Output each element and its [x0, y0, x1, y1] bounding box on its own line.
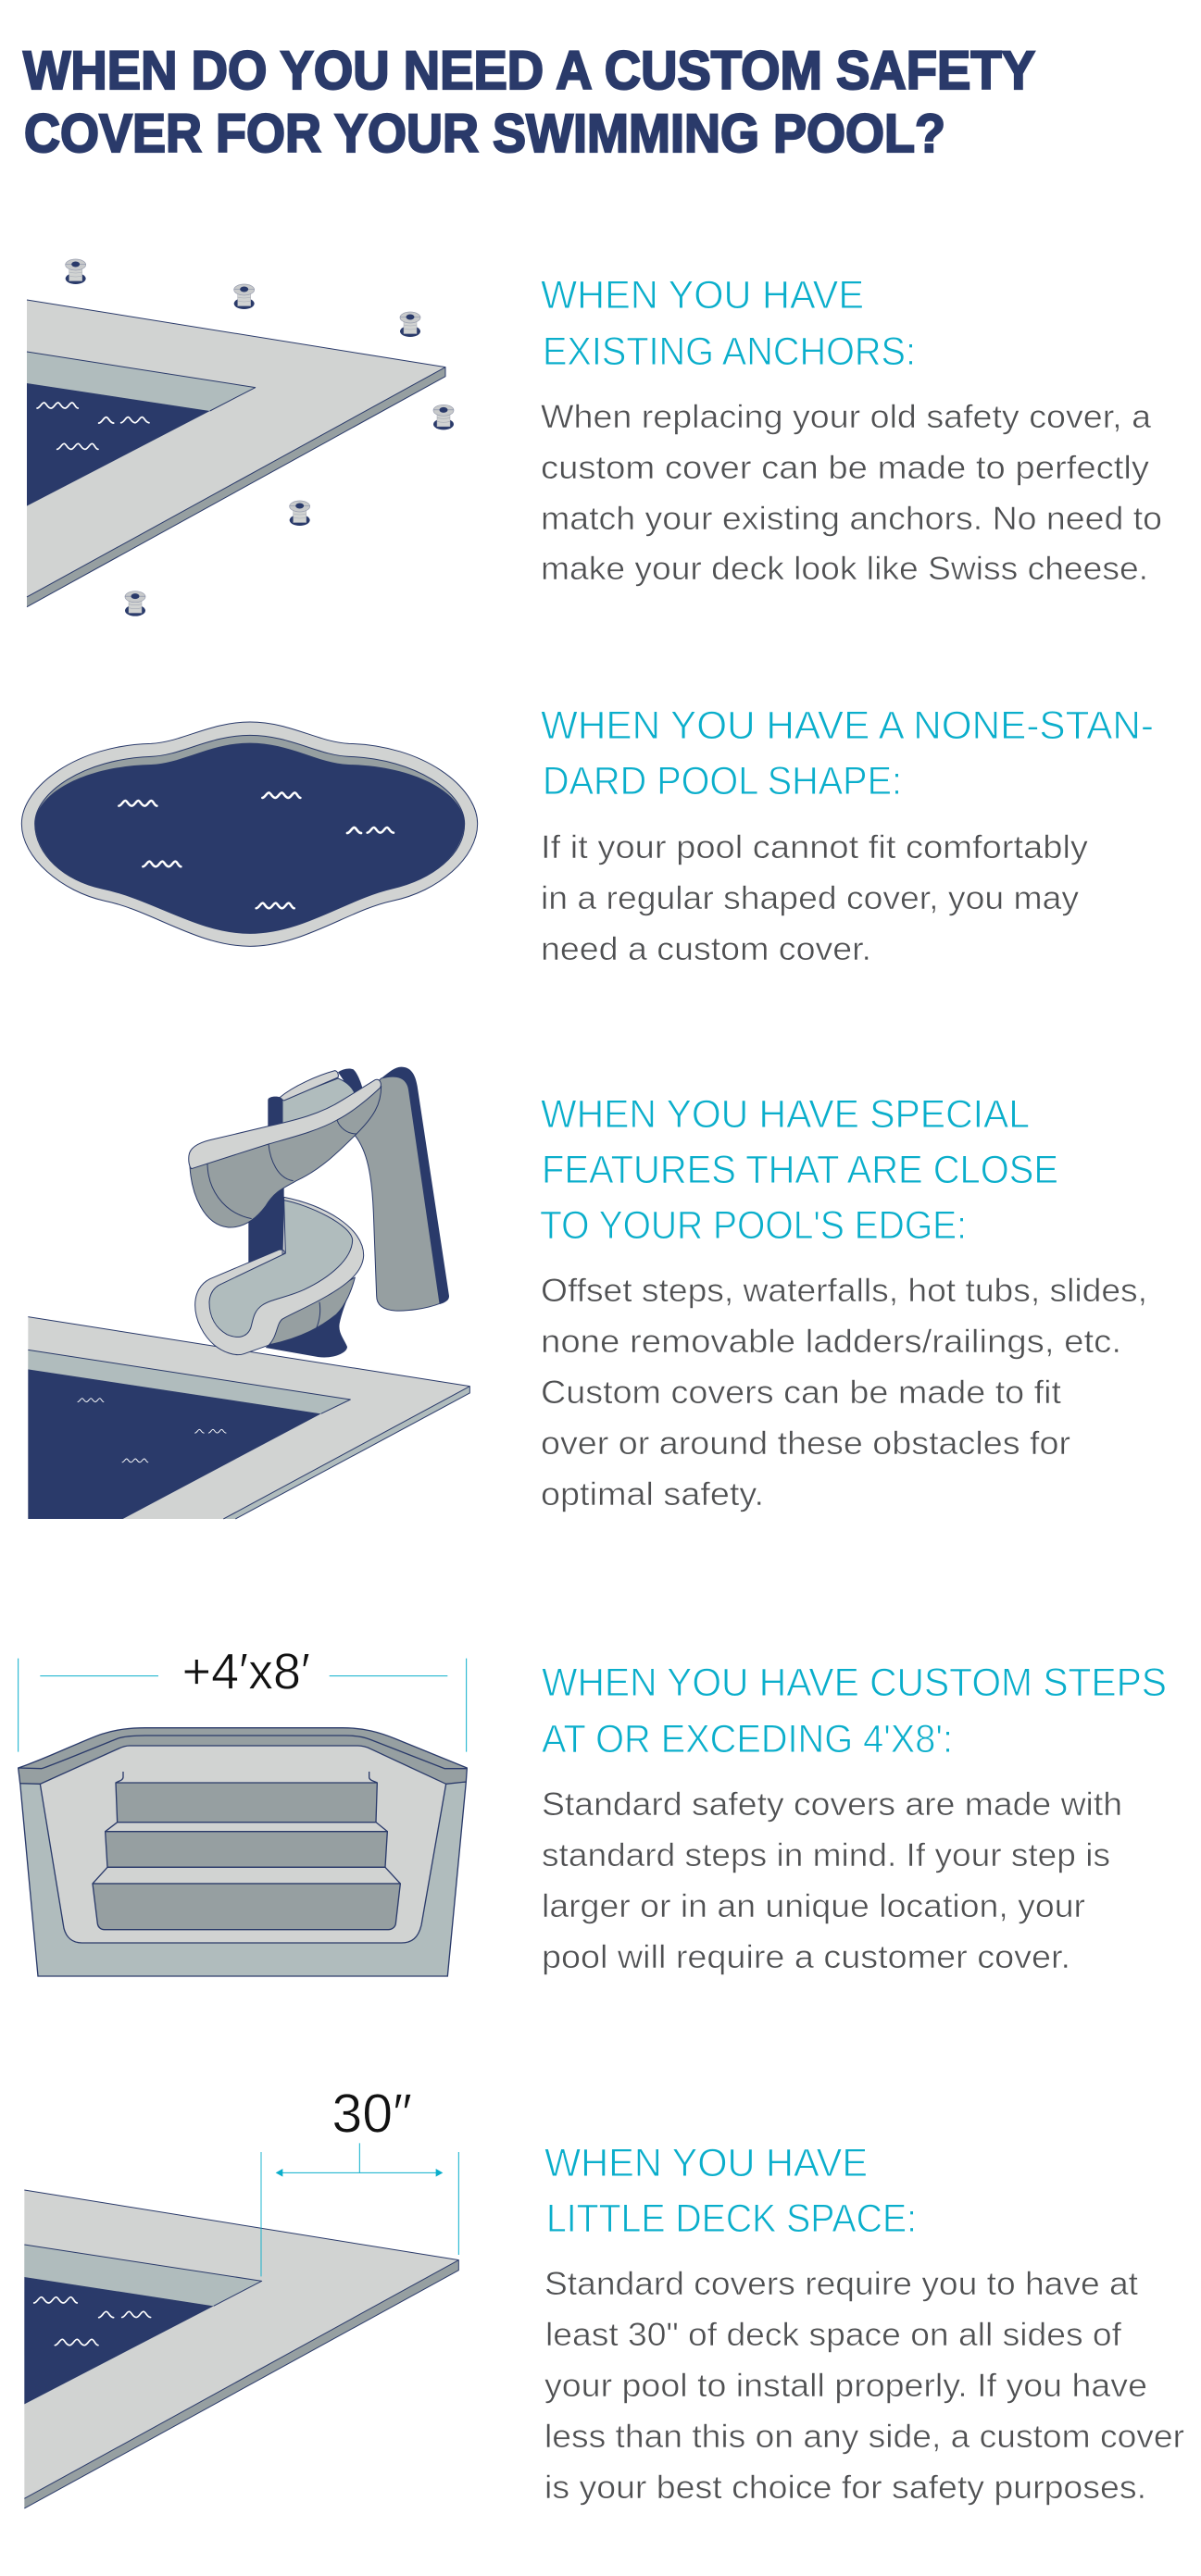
pool deck — [24, 2190, 458, 2508]
text block: special features — [540, 1092, 1147, 1512]
body text: none removable ladders/railings, etc. — [541, 1324, 1121, 1360]
heading: WHEN YOU HAVE A NONE-STAN- — [541, 703, 1154, 748]
title: WHEN DO YOU NEED A CUSTOM SAFETY — [23, 41, 1035, 101]
body text: Standard covers require you to have at — [544, 2266, 1138, 2302]
heading — [541, 703, 1154, 803]
pool coping — [19, 1728, 467, 1784]
heading: WHEN YOU HAVE CUSTOM STEPS — [542, 1661, 1167, 1705]
body text — [541, 1273, 1147, 1512]
body text: need a custom cover. — [541, 931, 871, 967]
slide base — [266, 1277, 355, 1357]
body text: match your existing anchors. No need to — [541, 501, 1162, 537]
pool inner wall — [27, 352, 256, 411]
text block: non-standard pool shape — [541, 703, 1154, 967]
slide top section back — [338, 1068, 364, 1097]
heading — [542, 1661, 1167, 1761]
body text: When replacing your old safety cover, a — [541, 399, 1152, 435]
slide front support — [340, 1076, 440, 1311]
panel: little deck space illustration — [24, 2082, 458, 2508]
pool water — [28, 1369, 321, 1519]
water ripples — [119, 792, 394, 908]
pool water — [35, 743, 465, 933]
slide upper rim — [189, 1079, 381, 1169]
pool inner wall — [28, 1350, 350, 1413]
body text: Offset steps, waterfalls, hot tubs, slides, — [541, 1273, 1147, 1309]
slide rear support — [382, 1067, 449, 1304]
panel: non-standard pool shape illustration — [21, 722, 478, 946]
slide centre post — [248, 1182, 284, 1268]
heading: LITTLE DECK SPACE: — [546, 2196, 917, 2241]
water ripples — [37, 403, 149, 449]
body text — [541, 399, 1162, 587]
body text: least 30" of deck space on all sides of — [545, 2317, 1121, 2353]
heading: WHEN YOU HAVE SPECIAL — [541, 1092, 1030, 1137]
body text: your pool to install properly. If you have — [544, 2368, 1147, 2404]
body text: pool will require a customer cover. — [542, 1939, 1070, 1975]
step well interior — [40, 1746, 446, 1943]
water ripples — [34, 2297, 151, 2346]
body text: standard steps in mind. If your step is — [542, 1837, 1110, 1873]
slide upper body — [190, 1086, 382, 1227]
pool inner wall — [24, 2245, 262, 2306]
dimension lines — [19, 1659, 467, 1752]
dimension label: 30″ — [332, 2082, 412, 2144]
body text: If it your pool cannot fit comfortably — [541, 829, 1089, 865]
heading — [544, 2141, 917, 2241]
body text: Standard safety covers are made with — [542, 1786, 1122, 1823]
icon: anchor 6 — [125, 591, 145, 616]
arrow: deck width — [276, 2169, 443, 2177]
pool shell — [20, 1782, 466, 1976]
pool deck — [28, 1317, 469, 1519]
icon: anchor 2 — [234, 284, 255, 309]
heading — [541, 273, 916, 374]
slide top section trough — [282, 1078, 355, 1126]
body text — [544, 2266, 1184, 2506]
icon: anchor 5 — [290, 501, 310, 526]
body text: over or around these obstacles for — [541, 1425, 1070, 1462]
icon: anchor 1 — [66, 259, 86, 284]
slide top section rim — [280, 1071, 338, 1101]
body text: optimal safety. — [541, 1476, 764, 1512]
panel: custom steps illustration — [19, 1643, 467, 1976]
body text: larger or in an unique location, your — [542, 1888, 1085, 1924]
text block: existing anchors — [541, 273, 1162, 587]
slide lower underside — [270, 1277, 355, 1345]
body text: in a regular shaped cover, you may — [541, 880, 1080, 916]
title: COVER FOR YOUR SWIMMING POOL? — [24, 104, 945, 164]
body text — [541, 829, 1089, 967]
slide lower rim — [195, 1197, 364, 1355]
text block: little deck space — [544, 2141, 1184, 2506]
steps — [93, 1772, 400, 1930]
body text: less than this on any side, a custom cover — [544, 2419, 1184, 2455]
pool water — [24, 2277, 214, 2404]
body text — [542, 1786, 1122, 1975]
panel: existing anchors illustration — [27, 259, 454, 616]
heading: WHEN YOU HAVE — [541, 273, 864, 317]
water ripples — [78, 1399, 226, 1462]
heading: TO YOUR POOL'S EDGE: — [540, 1203, 967, 1248]
body text: is your best choice for safety purposes. — [544, 2470, 1146, 2506]
dimension guide lines — [261, 2143, 458, 2276]
heading: AT OR EXCEDING 4'X8': — [542, 1717, 953, 1761]
dimension label: +4′x8′ — [182, 1643, 310, 1700]
slide lower trough — [209, 1201, 353, 1337]
slide upper post — [268, 1097, 282, 1132]
body text: custom cover can be made to perfectly — [541, 450, 1150, 486]
panel: special features slide illustration — [28, 1067, 469, 1519]
icon: anchor 3 — [400, 312, 420, 337]
heading — [540, 1092, 1058, 1248]
icon: anchor 4 — [433, 404, 454, 429]
body text: Custom covers can be made to fit — [541, 1375, 1061, 1411]
pool inner wall — [35, 735, 465, 933]
title — [23, 41, 1035, 164]
body text: make your deck look like Swiss cheese. — [541, 551, 1148, 587]
water slide — [189, 1067, 449, 1357]
heading: FEATURES THAT ARE CLOSE — [542, 1148, 1058, 1192]
heading: EXISTING ANCHORS: — [543, 330, 916, 374]
pool water — [27, 383, 210, 506]
heading: DARD POOL SHAPE: — [543, 759, 902, 803]
pool deck outline — [21, 722, 478, 946]
text block: custom steps — [542, 1661, 1167, 1975]
pool deck — [27, 300, 445, 607]
heading: WHEN YOU HAVE — [544, 2141, 868, 2185]
